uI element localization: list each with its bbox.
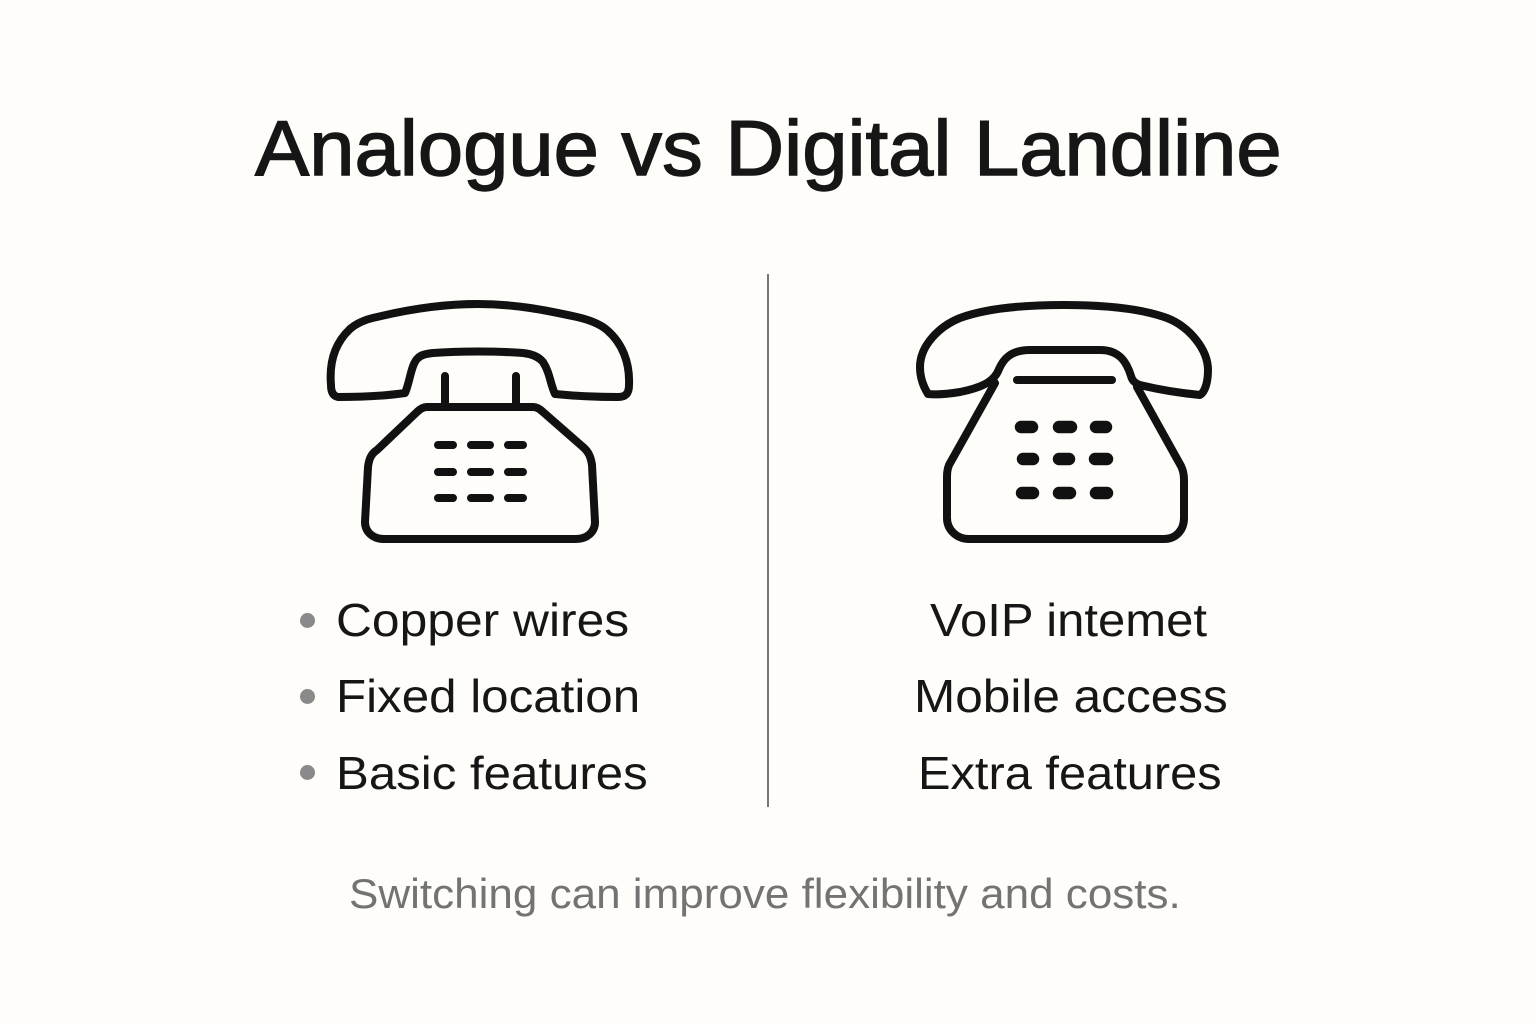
bullet: copper wires: [300, 613, 315, 628]
text: basic features: Basic features: [336, 747, 648, 799]
text: extra features: Extra features: [918, 747, 1222, 799]
footer note: Switching can improve flexibility and costs.: [349, 870, 1181, 917]
list: digital features: [914, 594, 1228, 799]
text: fixed location: Fixed location: [336, 670, 640, 722]
divider line: [767, 274, 769, 807]
bullet: basic features: [300, 765, 315, 780]
title: Analogue vs Digital Landline: [255, 104, 1282, 192]
bullet: fixed location: [300, 689, 315, 704]
list: analogue features: [300, 594, 648, 799]
icon: digital telephone: [916, 301, 1212, 543]
icon: analogue telephone: [326, 300, 634, 543]
text: mobile access: Mobile access: [914, 670, 1228, 722]
text: copper wires: Copper wires: [336, 594, 629, 646]
text: VoIP internet: VoIP intemet: [930, 594, 1207, 646]
